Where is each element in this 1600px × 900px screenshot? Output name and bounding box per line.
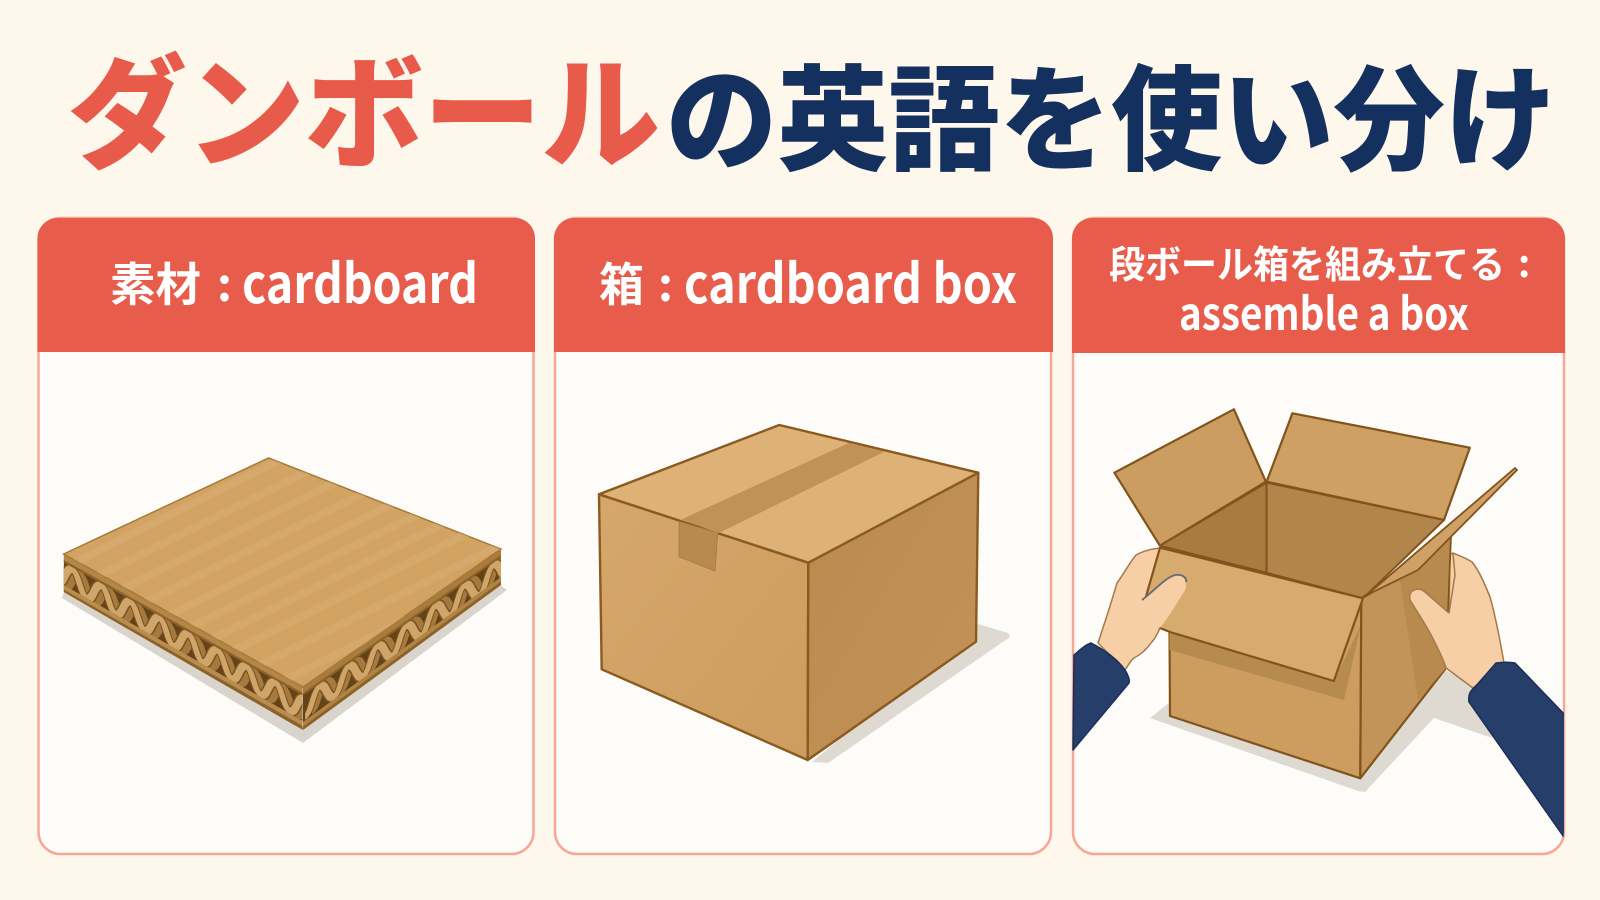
panel: assemble xyxy=(1072,218,1566,854)
panel header xyxy=(554,218,1053,352)
right face xyxy=(808,473,978,760)
header label: : xyxy=(217,249,232,315)
header label: 素材 xyxy=(110,249,201,315)
title: navy part: の英語を使い分け xyxy=(666,29,1556,194)
panel: material xyxy=(38,218,559,854)
panel header xyxy=(38,218,535,352)
header label: cardboard box xyxy=(684,240,1017,319)
box right side xyxy=(1360,537,1451,778)
flap shadow on box front xyxy=(1170,625,1361,700)
right sleeve xyxy=(1469,662,1566,840)
illustration: corrugated cardboard sheet xyxy=(62,457,507,743)
header label: assemble a box xyxy=(1179,278,1469,343)
panel body xyxy=(1073,218,1564,854)
left sleeve xyxy=(1073,643,1129,750)
illustration: closed box xyxy=(599,425,1010,763)
header label: 箱 xyxy=(599,249,644,315)
header label xyxy=(1109,233,1530,343)
right hand xyxy=(1410,553,1504,688)
left edge with flutes xyxy=(64,554,303,730)
top face xyxy=(64,458,501,687)
box interior back xyxy=(1267,483,1444,598)
illustration: hands assembling box xyxy=(1073,409,1566,840)
header label: cardboard xyxy=(242,240,478,319)
right side shade xyxy=(1400,537,1450,700)
title xyxy=(68,17,1556,194)
panel body xyxy=(38,218,534,854)
header label: : xyxy=(1518,233,1530,288)
shadow xyxy=(62,585,507,743)
shadow xyxy=(1150,670,1500,792)
right back flap xyxy=(1267,413,1470,520)
header label: 段ボール箱を組み立てる xyxy=(1109,234,1505,289)
shadow xyxy=(812,624,1010,763)
box interior left xyxy=(1160,483,1267,573)
right hand fingers behind box xyxy=(1449,553,1490,620)
left hand xyxy=(1098,548,1160,670)
top face stripes xyxy=(73,460,500,681)
tape flap xyxy=(679,522,718,571)
front flap xyxy=(1145,548,1363,681)
header label xyxy=(110,240,478,319)
left back flap xyxy=(1114,409,1266,546)
box front xyxy=(1170,603,1361,778)
front face xyxy=(599,494,808,760)
right edge with flutes xyxy=(303,550,501,730)
panel header xyxy=(1072,218,1565,353)
header label: : xyxy=(658,249,673,315)
top face xyxy=(599,425,978,563)
title: red part: ダンボール xyxy=(68,17,660,194)
tape on top xyxy=(682,443,884,533)
panel body xyxy=(555,218,1051,854)
panel: box xyxy=(554,218,1053,854)
left thumb xyxy=(1140,575,1186,628)
right flap xyxy=(1365,468,1517,597)
